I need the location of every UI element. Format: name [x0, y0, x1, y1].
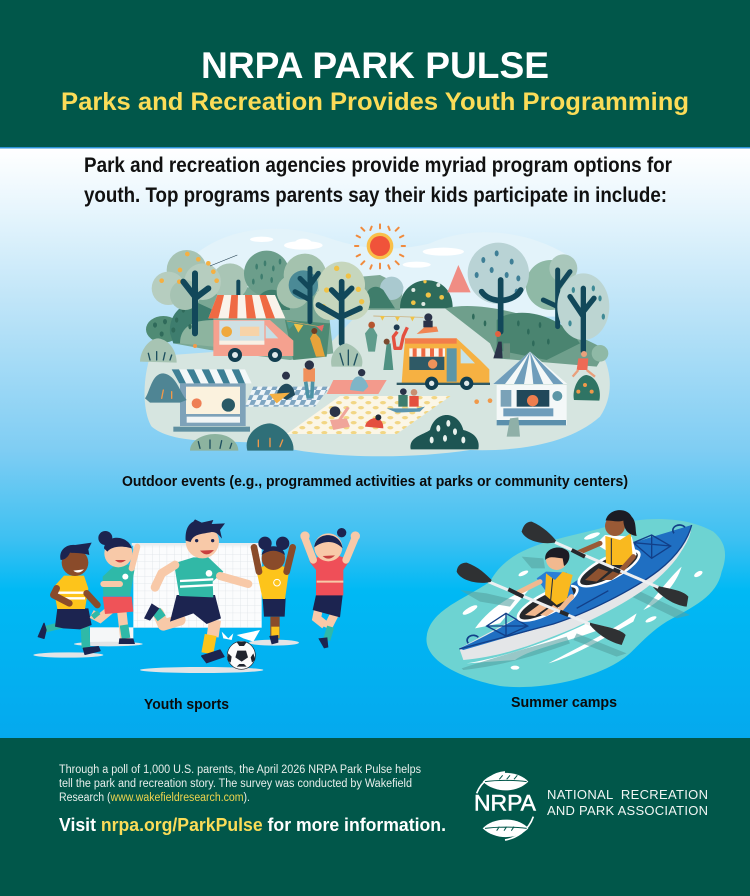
picnic blankets — [245, 380, 451, 434]
kid in yellow jersey cheering — [254, 537, 293, 644]
illustration: youth sports kids playing soccer — [33, 519, 360, 673]
subtitle: Parks and Recreation Provides Youth Programming — [61, 88, 689, 116]
left market stall — [172, 369, 252, 432]
footer call to action: Visit nrpa.org/ParkPulse for more information. — [59, 814, 446, 835]
front paddler — [517, 548, 574, 610]
right side trees — [445, 243, 609, 367]
logo emblem — [474, 772, 536, 840]
people in the park — [269, 313, 595, 437]
footer band — [0, 738, 750, 896]
NRPA logo — [474, 772, 708, 840]
caption: summer camps: Summer camps — [511, 695, 617, 711]
footer survey note: Through a poll of 1,000 U.S. parents, the April 2026 NRPA Park Pulse helps — [59, 764, 421, 776]
ground shadows — [33, 640, 299, 673]
water shadows — [460, 557, 690, 670]
bunting flags — [287, 316, 423, 327]
ground blob — [145, 308, 610, 456]
soccer ball and splash — [222, 630, 260, 669]
kayak deck — [459, 525, 692, 650]
logo wordmark: NATIONAL RECREATION — [547, 787, 708, 802]
page background gradient — [0, 147, 750, 739]
tree with yellow fruit — [313, 262, 403, 343]
logo emblem: NRPA — [474, 790, 536, 815]
blue and white tent stall — [493, 352, 567, 425]
clouds — [250, 237, 464, 268]
caption: youth sports: Youth sports — [144, 697, 229, 713]
water ripples — [461, 531, 704, 670]
illustration: outdoor events park scene — [140, 224, 610, 456]
intro text: youth. Top programs parents say their kids participate in include: — [84, 184, 667, 207]
soccer goal — [90, 543, 263, 642]
orange food truck — [397, 338, 490, 390]
kid in teal shirt — [92, 531, 137, 644]
rear paddle shaft — [555, 542, 658, 587]
intro text — [84, 154, 672, 207]
kid in red jersey cheering — [300, 528, 360, 648]
footer survey note: tell the park and recreation story. The survey was conducted by Wakefield — [59, 778, 412, 790]
main kid kicking the ball — [144, 519, 248, 663]
rear paddle blades — [522, 522, 688, 607]
footer survey note: Research (www.wakefieldresearch.com). — [59, 792, 250, 804]
kayak hull — [459, 525, 692, 660]
sun — [355, 224, 405, 269]
illustration: summer camp kayakers — [426, 510, 725, 687]
foreground bushes — [140, 338, 600, 451]
logo wordmark — [547, 787, 708, 818]
caption: outdoor events: Outdoor events (e.g., programmed activities at parks or community centers) — [122, 474, 628, 490]
title: NRPA PARK PULSE — [201, 45, 549, 86]
intro text: Park and recreation agencies provide myriad program options for — [84, 154, 672, 177]
kid in yellow shirt — [38, 543, 100, 654]
sky blob — [197, 229, 570, 317]
front paddle — [457, 550, 626, 645]
header banner — [0, 0, 750, 148]
flower dome and pink tree — [400, 265, 471, 308]
footer survey note — [59, 764, 421, 804]
pink food truck — [208, 295, 293, 362]
tree with orange fruit — [152, 250, 237, 333]
logo wordmark: AND PARK ASSOCIATION — [547, 803, 708, 818]
water patch — [426, 519, 725, 687]
background trees and hills left — [146, 251, 333, 360]
rear paddler — [578, 510, 637, 572]
